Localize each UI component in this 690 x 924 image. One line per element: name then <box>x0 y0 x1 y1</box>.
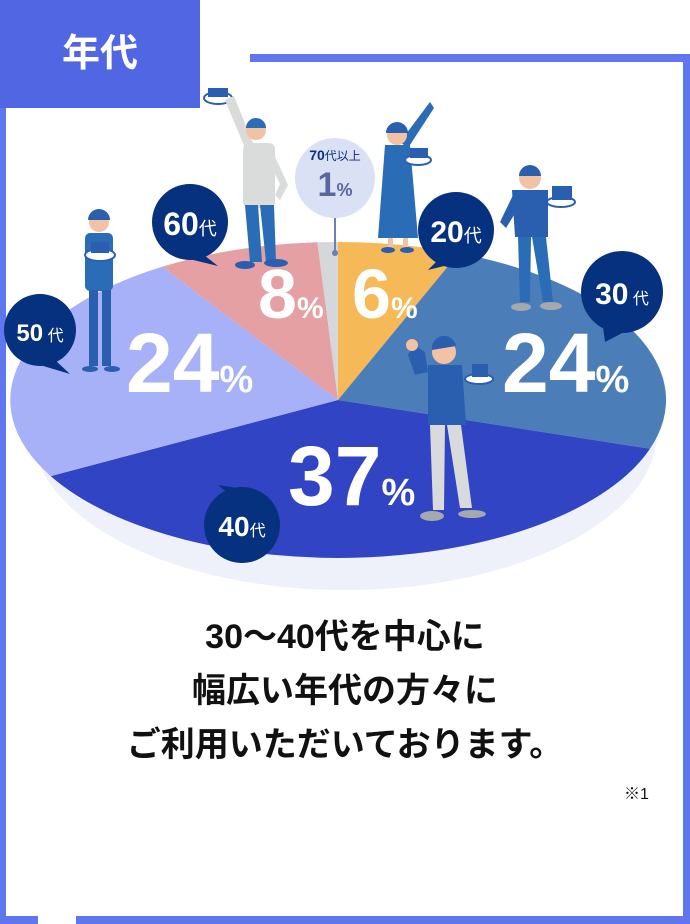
badges: 50 代 <box>16 320 64 347</box>
badges: 20代 <box>430 216 482 249</box>
percent labels: 37% <box>288 429 415 523</box>
badges: 30 代 <box>595 278 649 311</box>
person 20s <box>378 102 434 253</box>
main message: 30～40代を中心に <box>205 618 485 656</box>
person 40s <box>406 336 493 521</box>
badges: 60代 <box>163 206 217 242</box>
main message: 幅広い年代の方々に <box>192 672 498 710</box>
callout 70代以上 <box>295 138 375 256</box>
person 50s <box>82 209 120 372</box>
badges <box>4 184 663 563</box>
percent labels: 8% <box>258 255 324 333</box>
person 60s <box>204 88 288 269</box>
main message <box>127 618 563 764</box>
percent labels: 24% <box>502 316 629 410</box>
main message: ご利用いただいております。 <box>127 726 563 764</box>
footnote: ※1 <box>624 786 649 803</box>
percent labels <box>126 255 629 523</box>
percent labels: 6% <box>352 255 418 333</box>
callout 70代以上: 1% <box>318 166 352 204</box>
callout 70代以上: 70代以上 <box>309 147 361 163</box>
badges: 40代 <box>218 511 266 542</box>
person 30s <box>500 165 575 311</box>
title tab: 年代 <box>62 33 138 75</box>
title tab <box>0 0 200 108</box>
percent labels: 24% <box>126 316 253 410</box>
